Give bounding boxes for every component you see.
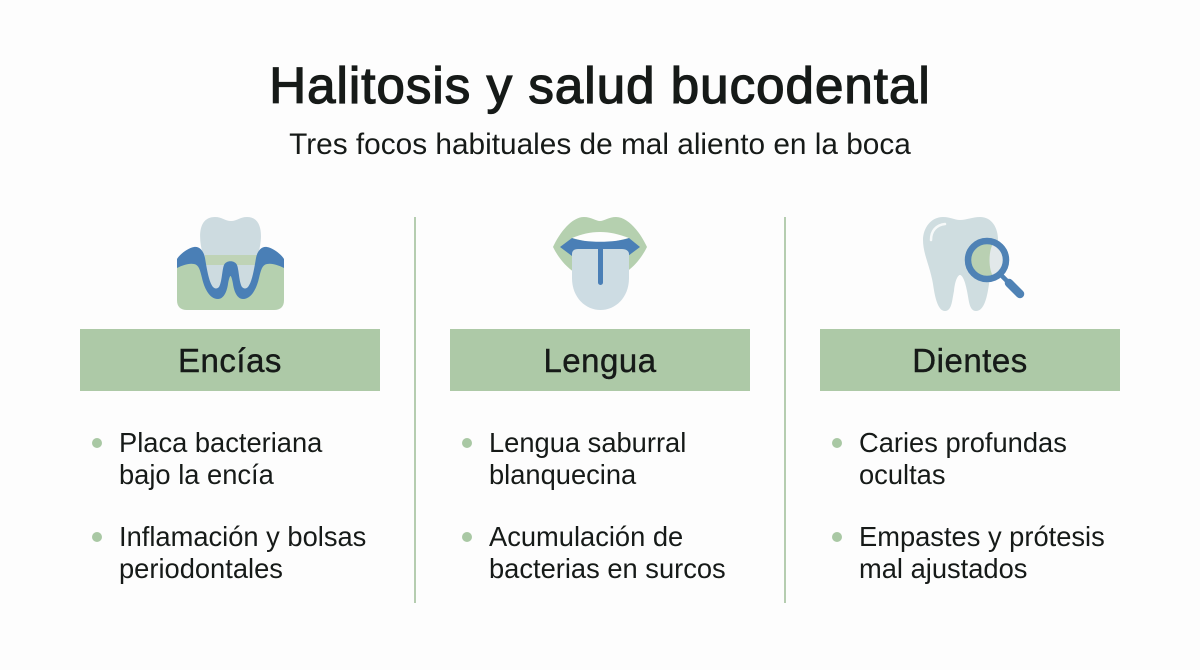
bullet: Caries: Caries profundas <box>859 427 1067 458</box>
bullet: Empastes: mal ajustados <box>859 553 1027 584</box>
bullet: Empastes <box>832 521 1105 584</box>
title: Halitosis y salud bucodental <box>269 57 931 114</box>
bullet: Placa bacteriana <box>92 427 322 490</box>
panel: Dientes <box>820 329 1120 391</box>
panel: Dientes: Dientes <box>912 342 1028 379</box>
subtitle: Tres focos habituales de mal aliento en la boca <box>289 128 911 161</box>
bullet: Lengua saburral: blanquecina <box>489 459 636 490</box>
bullet: Lengua saburral <box>462 427 686 490</box>
bullet: Acumulación <box>462 521 726 584</box>
bullet: Caries: ocultas <box>859 459 946 490</box>
panel: Lengua <box>450 329 750 391</box>
bullet: Placa bacteriana: Placa bacteriana <box>119 427 322 458</box>
bullet: Inflamación: Inflamación y bolsas <box>119 521 366 552</box>
bullet: Inflamación <box>92 521 366 584</box>
bullet: Placa bacteriana: bajo la encía <box>119 459 274 490</box>
bullet: Lengua saburral: Lengua saburral <box>489 427 686 458</box>
bullet: Caries <box>832 427 1067 490</box>
panel: Encías <box>80 329 380 391</box>
bullet: Acumulación: bacterias en surcos <box>489 553 726 584</box>
panel: Encías: Encías <box>178 342 282 379</box>
bullet: Acumulación: Acumulación de <box>489 521 683 552</box>
bullet: Inflamación: periodontales <box>119 553 283 584</box>
panel: Lengua: Lengua <box>543 342 657 379</box>
bullet: Empastes: Empastes y prótesis <box>859 521 1105 552</box>
